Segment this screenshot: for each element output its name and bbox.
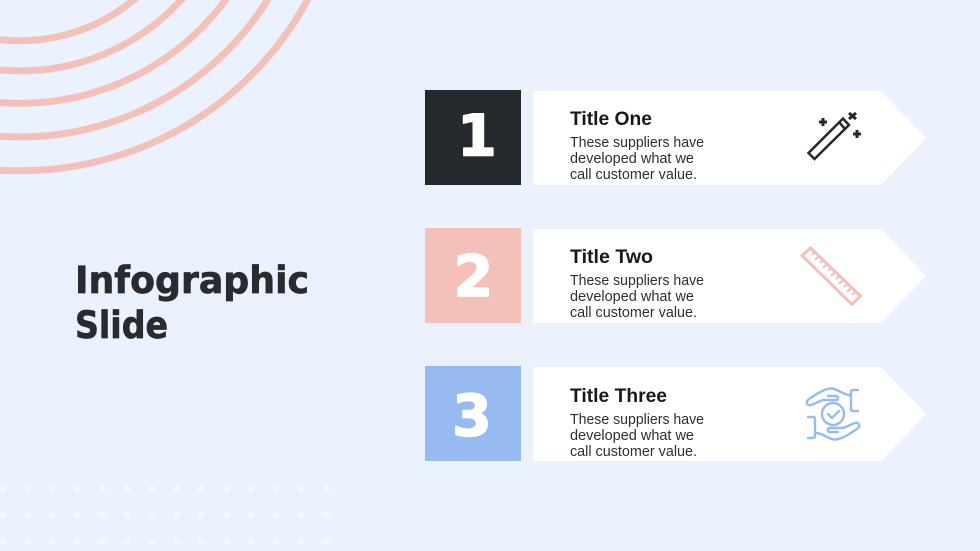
body text 3	[570, 412, 704, 460]
arrow card 1	[533, 91, 926, 185]
body text 2: developed what we	[570, 289, 694, 305]
number box 2	[425, 228, 521, 323]
number box 2: 2	[454, 244, 493, 310]
heading 3: Title Three	[570, 386, 667, 407]
body text 1: call customer value.	[570, 167, 697, 183]
icon: magic wand	[808, 113, 861, 159]
body text 1: developed what we	[570, 151, 694, 167]
body text 3: developed what we	[570, 428, 694, 444]
dot grid decoration	[0, 485, 330, 545]
heading 1: Title One	[570, 109, 652, 130]
title: Infographic	[75, 259, 309, 302]
title	[75, 259, 309, 347]
number box 1: 1	[457, 104, 497, 170]
body text 2: call customer value.	[570, 305, 697, 321]
panel: item 3	[425, 366, 926, 461]
panel: item 1	[425, 90, 926, 185]
body text 2	[570, 273, 704, 321]
body text 3: These suppliers have	[570, 412, 704, 428]
arrow card 3	[533, 367, 926, 461]
number box 3: 3	[452, 384, 492, 450]
number box 3	[425, 366, 521, 461]
heading 2: Title Two	[570, 247, 653, 268]
body text 2: These suppliers have	[570, 273, 704, 289]
number box 1	[425, 90, 521, 185]
body text 1: These suppliers have	[570, 135, 704, 151]
body text 3: call customer value.	[570, 444, 697, 460]
icon: ruler	[802, 248, 860, 304]
icon: hands holding check	[807, 388, 859, 440]
panel: item 2	[425, 228, 926, 323]
concentric arcs decoration	[0, 0, 347, 171]
title: Slide	[75, 304, 168, 347]
body text 1	[570, 135, 704, 183]
arrow card 2	[533, 229, 926, 323]
